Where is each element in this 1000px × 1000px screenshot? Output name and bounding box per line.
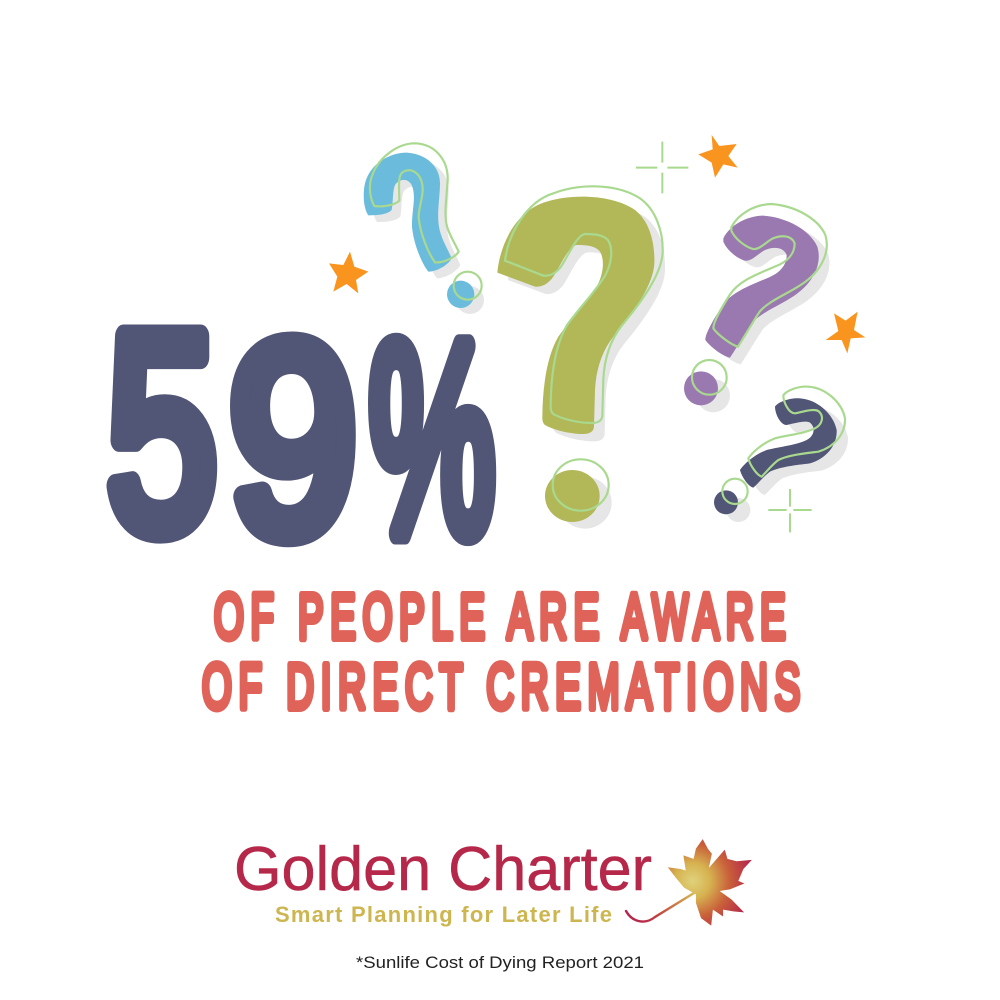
headline: OF PEOPLE ARE AWARE: [214, 582, 786, 653]
headline: OF DIRECT CREMATIONS: [202, 652, 800, 723]
icon: orange star top: [698, 135, 738, 178]
icon: sparkle top: [636, 142, 688, 193]
big statistic: 59%: 9: [229, 288, 357, 591]
question mark: blue: [364, 143, 484, 314]
question mark: purple: [684, 204, 829, 412]
big statistic: 59%: 5: [107, 276, 217, 589]
icon: orange star right: [826, 312, 865, 353]
big statistic: 59%: %: [369, 287, 495, 591]
question mark: olive: [497, 186, 665, 529]
question mark: navy: [714, 387, 848, 522]
logo: Golden Charter: [234, 835, 752, 927]
icon: maple leaf: [668, 839, 752, 926]
icon: sparkle bottom: [768, 489, 812, 532]
headline: [202, 582, 800, 723]
logo tagline: Smart Planning for Later Life: [275, 902, 612, 927]
source footnote: *Sunlife Cost of Dying Report 2021: [356, 953, 644, 972]
big statistic: 59%: [107, 276, 495, 591]
icon: leaf stem: [626, 893, 694, 922]
logo wordmark: Golden Charter: [234, 835, 652, 904]
icon: orange star left: [329, 252, 368, 293]
